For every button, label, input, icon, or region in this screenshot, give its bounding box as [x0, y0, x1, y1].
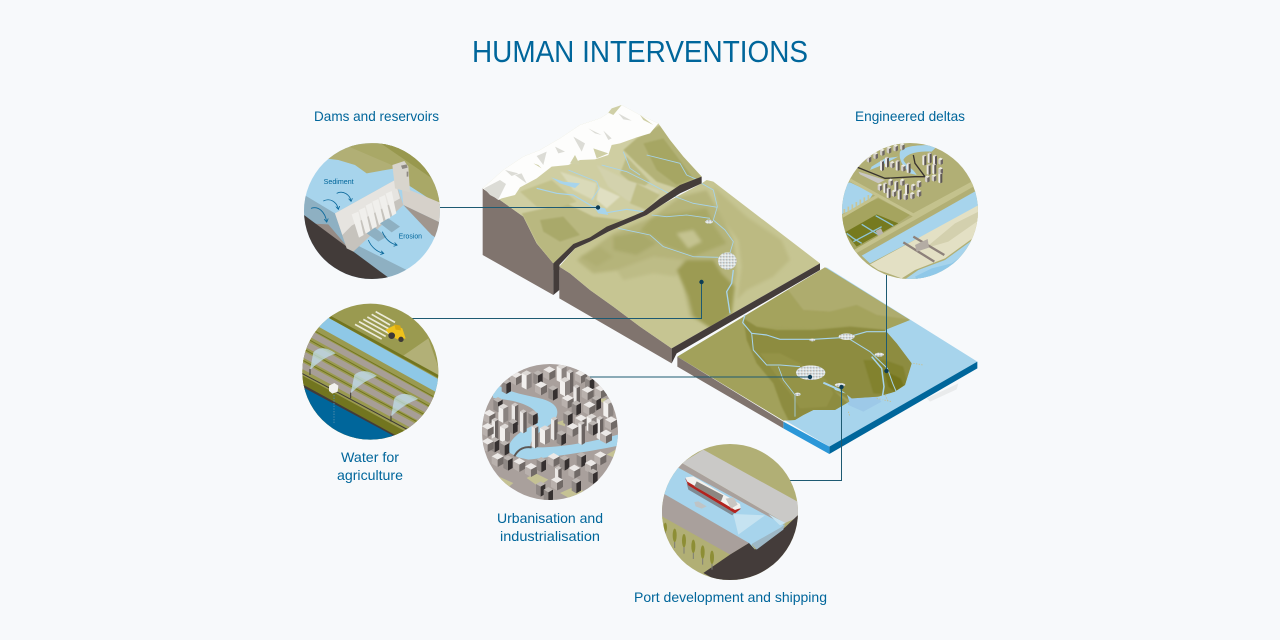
lower quay: [660, 494, 749, 555]
sea: [902, 233, 982, 282]
city: [718, 252, 737, 270]
land bank: [325, 142, 442, 207]
water: [662, 467, 785, 550]
elevation bands: [577, 187, 790, 330]
small boat: [694, 501, 707, 509]
circle illustration: city: [480, 363, 620, 503]
panel: urbanisation and industrialisation: [480, 363, 620, 544]
connector: deltas: [886, 275, 888, 371]
circle illustration: dam: [302, 142, 442, 283]
town: [705, 220, 713, 224]
lock gate: [752, 524, 785, 550]
surface: [559, 180, 820, 348]
field channels: [847, 216, 893, 243]
title: HUMAN INTERVENTIONS: [472, 34, 808, 69]
panel: port development and shipping: [634, 441, 827, 605]
land elevation bands: [743, 263, 915, 423]
connector: dams: [440, 206, 598, 208]
rivers: [618, 183, 733, 313]
side wall: [402, 190, 440, 222]
silted water: [302, 193, 407, 282]
bay shallow water: [843, 395, 882, 412]
arrows: [311, 192, 397, 253]
label: urbanisation: [497, 510, 603, 544]
outlet tower: [392, 161, 410, 192]
panel: dams and reservoirs: [302, 108, 442, 283]
mountain rivers: [537, 152, 702, 213]
sea front edge: [829, 362, 977, 454]
city blocks: [867, 143, 943, 200]
terrain model: river basin from mountains to sea: [483, 105, 977, 454]
coastal land: [677, 267, 912, 421]
green patches: [498, 398, 616, 498]
lagoon left: [840, 182, 873, 215]
cliff: [703, 515, 802, 581]
polder bank: [840, 198, 910, 252]
dark cut between block 2 and 3: [672, 263, 820, 363]
lower field: [660, 515, 730, 573]
soil left face: [559, 267, 672, 363]
road: [682, 450, 800, 523]
trees: [665, 532, 712, 570]
block 1: mountains: [483, 105, 703, 295]
sprinklers: [310, 348, 418, 417]
river: [490, 385, 620, 460]
furrows: [300, 334, 438, 429]
circle illustration: irrigation: [298, 302, 442, 445]
quay strip: [678, 463, 785, 525]
polder fields: [845, 214, 898, 247]
field below canal: [302, 325, 442, 442]
dots: [596, 205, 889, 389]
label: water for agriculture: Water for: [341, 449, 399, 465]
sea surface: [677, 267, 977, 447]
bridge: [514, 447, 532, 456]
circle illustration: delta: [840, 142, 982, 282]
label: erosion: Erosion: [399, 233, 422, 240]
plain cities: [795, 333, 884, 396]
buildings: [482, 364, 617, 502]
beach: [870, 203, 982, 278]
coast islands: [848, 363, 923, 417]
barrier: [903, 237, 944, 262]
reservoir: [593, 206, 608, 215]
road and bank: [300, 372, 408, 430]
heading: deltas: Engineered deltas: [855, 108, 965, 124]
panel: engineered deltas: [840, 108, 982, 282]
canal: [318, 318, 442, 393]
label: urbanisation: Urbanisation and: [497, 510, 603, 526]
reservoir water: [304, 388, 394, 440]
ship: [685, 476, 741, 515]
label: water for agriculture: agriculture: [337, 467, 403, 483]
label: sediment: Sediment: [324, 179, 354, 186]
soil left face: [483, 188, 553, 295]
pump house: [329, 383, 338, 394]
spillway shadows: [367, 218, 400, 242]
embankment: [858, 155, 925, 178]
soil left edge: [677, 357, 783, 428]
dark cut between block 1 and 2: [553, 177, 702, 270]
snow shadow facets: [484, 113, 632, 199]
label: water for agriculture: [337, 449, 403, 483]
tractor: [386, 324, 406, 342]
sea left edge: [783, 422, 829, 454]
sediment mound: [316, 224, 346, 246]
connector: port: [790, 387, 842, 480]
spillways: [352, 191, 396, 238]
lighter field: [404, 338, 438, 375]
canal bank: [855, 183, 975, 252]
connector: agriculture: [411, 282, 702, 318]
light beam: [733, 514, 765, 535]
circle illustration: port: [660, 441, 802, 581]
mountain surface: [483, 105, 702, 263]
snow caps: [483, 105, 658, 200]
connector lines with location dots: [411, 205, 889, 481]
dam body: [335, 180, 403, 252]
shipping canal: [862, 188, 982, 263]
label: port: Port development and shipping: [634, 589, 827, 605]
gap face of cut: [553, 260, 559, 295]
connector: urbanisation: [583, 376, 810, 378]
heading: dams: Dams and reservoirs: [314, 108, 439, 124]
sluice comb: [844, 195, 868, 215]
lake: [551, 177, 580, 188]
slope shading: [520, 125, 703, 265]
polder walls: [850, 180, 972, 215]
polder pump: [876, 228, 883, 236]
label: urbanisation: industrialisation: [500, 528, 600, 544]
panel: water for agriculture: [298, 302, 442, 483]
bedrock: [304, 215, 388, 279]
block 2: middle basin: [559, 180, 820, 363]
delta block faint shadow: [927, 383, 958, 402]
harrow rows: [355, 312, 395, 339]
rivers of the plain: [743, 315, 897, 417]
block 3: coastal plain and sea: [677, 263, 977, 454]
upper river: [900, 145, 938, 175]
